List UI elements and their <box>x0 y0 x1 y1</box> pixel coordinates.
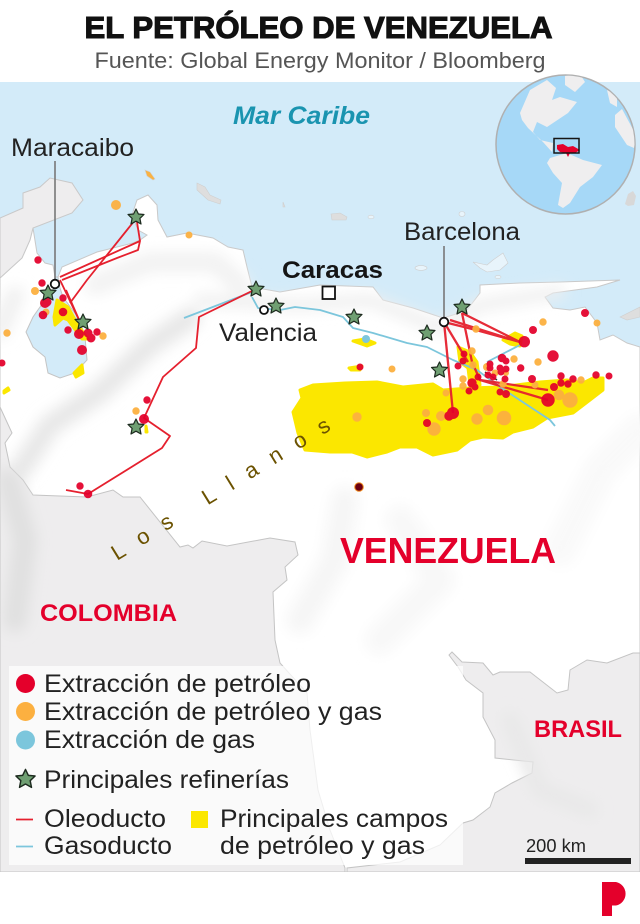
marker: Maracaibo <box>11 134 134 288</box>
scale bar <box>525 836 631 864</box>
label: Colombia: COLOMBIA <box>40 600 177 627</box>
land: Colombia <box>0 407 345 872</box>
gas pipelines <box>184 292 555 426</box>
locator globe <box>496 74 636 214</box>
hillshade relief <box>0 262 640 640</box>
Europe and Africa edge <box>615 109 636 148</box>
legend: gas pipeline: Gasoducto <box>44 832 172 860</box>
logo <box>602 882 626 916</box>
legend: main fields: de petróleo y gas <box>220 832 425 860</box>
label: Los Llanos: Los Llanos <box>107 412 334 565</box>
island at globe edge <box>625 191 636 206</box>
marker: Barcelona: Barcelona <box>404 218 520 246</box>
islands <box>145 170 640 320</box>
Greenland <box>565 74 585 92</box>
land: Venezuela and surroundings <box>0 195 640 872</box>
legend: oil and gas extraction: Extracción de petróleo y gas <box>44 698 382 726</box>
legend: refineries: Principales refinerías <box>44 766 289 794</box>
North America <box>520 80 577 152</box>
legend <box>9 666 463 865</box>
dark extraction point <box>355 483 363 491</box>
source subtitle: Fuente: Global Energy Monitor / Bloomberg <box>94 48 546 73</box>
title: EL PETRÓLEO DE VENEZUELA <box>84 9 552 45</box>
sea <box>0 82 640 346</box>
marker: Valencia <box>219 305 317 341</box>
South America <box>547 153 602 208</box>
legend: main fields: Principales campos <box>220 805 448 833</box>
Lake Maracaibo <box>26 277 87 378</box>
label: Mar Caribe: Mar Caribe <box>233 102 370 130</box>
gas extraction point <box>362 335 370 343</box>
legend: gas extraction: Extracción de gas <box>44 726 255 754</box>
legend: oil extraction: Extracción de petróleo <box>44 670 311 698</box>
scale bar: 200 km <box>526 836 586 856</box>
label: Venezuela: VENEZUELA <box>340 530 556 571</box>
land: Brasil <box>347 652 640 872</box>
oil extraction points <box>0 256 612 498</box>
main oil and gas fields <box>4 300 603 457</box>
relief on neighbouring countries <box>0 466 534 778</box>
legend: oil pipeline: Oleoducto <box>44 805 166 833</box>
marker: Maracaibo: Maracaibo <box>11 134 134 162</box>
oil pipelines <box>60 220 256 494</box>
refineries <box>40 209 470 434</box>
Venezuela on globe <box>557 144 580 157</box>
legend: main fields <box>191 805 448 860</box>
marker: Valencia: Valencia <box>219 319 317 347</box>
locator frame <box>554 138 579 153</box>
label: Brasil: BRASIL <box>534 716 622 743</box>
marker: Caracas: Caracas <box>282 257 383 284</box>
marker: Barcelona <box>404 218 520 326</box>
oil and gas extraction points <box>3 200 601 436</box>
marker: Caracas <box>282 257 383 299</box>
land: Guajira, Colombia north <box>0 178 83 278</box>
